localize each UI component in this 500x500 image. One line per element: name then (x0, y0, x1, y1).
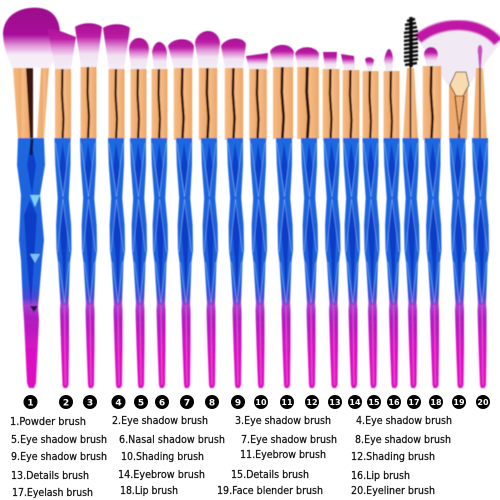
brush 6: nasal shadow brush (151, 42, 168, 388)
number badges: 18 (430, 398, 442, 407)
brush name legend: 3.Eye shadow brush (235, 415, 331, 427)
brush name legend: 2.Eye shadow brush (112, 415, 208, 427)
brush 7: eye shadow brush (168, 39, 194, 388)
brush 1: powder brush (3, 8, 60, 388)
number badges: 13 (329, 398, 341, 407)
brush 5: eye shadow brush (129, 38, 149, 388)
brush name legend: 4.Eye shadow brush (356, 415, 452, 427)
brush 4: eye shadow brush (103, 24, 130, 388)
brush name legend (10, 415, 452, 499)
brush name legend: 7.Eye shadow brush (241, 434, 337, 446)
number badges: 7 (184, 398, 190, 408)
brush 3: eye shadow brush (75, 23, 102, 388)
number badges: 9 (235, 398, 241, 408)
brush 15: details brush (362, 57, 380, 388)
brush 2: eye shadow brush (47, 26, 76, 388)
brush 9: eye shadow brush (221, 38, 246, 388)
brush 20: eyeliner brush (472, 45, 489, 388)
number badges (24, 395, 490, 409)
brush name legend: 14.Eyebrow brush (118, 469, 205, 481)
brush name legend: 8.Eye shadow brush (355, 434, 451, 446)
number badges: 8 (209, 398, 215, 408)
number badges: 10 (255, 398, 267, 407)
number badges: 1 (27, 398, 34, 408)
brush name legend: 12.Shading brush (351, 451, 435, 463)
brush name legend: 17.Eyelash brush (12, 487, 93, 499)
brush name legend: 15.Details brush (231, 469, 309, 481)
brush 11: eyebrow brush (270, 45, 294, 388)
number badges: 3 (87, 398, 93, 408)
brush name legend: 1.Powder brush (10, 416, 86, 428)
brush 16: lip brush (384, 49, 400, 388)
number badges: 5 (138, 398, 144, 408)
brush name legend: 18.Lip brush (120, 485, 178, 497)
number badges: 15 (368, 398, 380, 407)
brush 13: details brush (323, 52, 340, 388)
number badges: 6 (159, 398, 165, 408)
brush name legend: 11.Eyebrow brush (240, 449, 326, 461)
brush 10: shading brush (246, 53, 268, 388)
number badges: 2 (63, 398, 69, 408)
brush 8: eye shadow brush (195, 31, 220, 388)
brush set (3, 8, 500, 388)
number badges: 4 (115, 398, 122, 408)
brush 12: shading brush (295, 47, 319, 388)
number badges: 11 (281, 398, 293, 407)
number badges: 17 (408, 398, 420, 407)
brush name legend: 16.Lip brush (351, 470, 410, 482)
number badges: 12 (306, 398, 318, 407)
brush name legend: 10.Shading brush (121, 451, 204, 463)
brush name legend: 19.Face blender brush (217, 485, 323, 497)
number badges: 14 (349, 398, 361, 407)
brush 19: face blender brush (417, 23, 500, 388)
brush name legend: 20.Eyeliner brush (351, 485, 435, 497)
brush 18: lip brush (423, 47, 442, 388)
brush name legend: 5.Eye shadow brush (11, 434, 107, 446)
number badges: 19 (453, 398, 465, 407)
brush 14: eyebrow brush (341, 54, 360, 388)
brush name legend: 9.Eye shadow brush (11, 451, 107, 463)
brush 17: eyelash brush (402, 17, 420, 388)
number badges: 16 (388, 398, 400, 407)
brush name legend: 13.Details brush (11, 470, 89, 482)
number badges: 20 (477, 398, 489, 407)
brush name legend: 6.Nasal shadow brush (119, 434, 225, 446)
